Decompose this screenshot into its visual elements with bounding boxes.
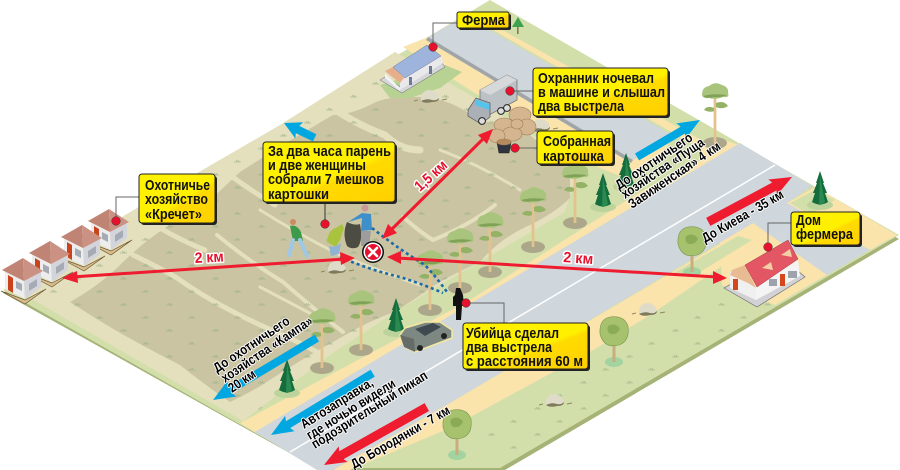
callout: farmer's house: фермера [796, 226, 854, 243]
field: dark tan furrows [70, 97, 570, 402]
icon: farmer's house [724, 240, 805, 307]
road text: to Kiev: До Киева - 35 км [699, 187, 786, 246]
people collecting potatoes [289, 204, 372, 256]
farm road kerb [426, 37, 633, 163]
person: man in blue [348, 204, 372, 246]
road text: Kampa: хозяйства «Кампа» [218, 313, 315, 385]
callout: potato pickers: картошки [268, 186, 329, 203]
icon: collected potato sacks [489, 107, 536, 153]
callout: farm [429, 12, 511, 51]
trees [274, 83, 833, 460]
icon: farm building [380, 45, 445, 93]
road text: Kampa: 20 км [225, 366, 259, 395]
farm lawn [380, 65, 462, 98]
callout: killer: два выстрела [466, 339, 553, 356]
arrow: red to Borodyanka [320, 399, 431, 470]
arrow: 2 km to farmer's house [387, 251, 727, 284]
arrow: blue top-left [280, 115, 319, 146]
arrow: 1,5 km [382, 129, 493, 239]
arrow: blue to Kampa [208, 330, 322, 408]
road text: petrol station: подозрительный пикап [309, 368, 430, 452]
crime scene marker [362, 241, 384, 263]
road text: petrol station: Автозаправка, [298, 375, 376, 432]
road text: Pushcha Zavizhenskaya: Завиженская» 4 км [625, 139, 723, 211]
callout: collected potatoes: картошка [543, 148, 605, 165]
field: light wavy stripes [133, 113, 520, 352]
arrow: blue to Pushcha [632, 112, 705, 165]
callout: guard: Охранник ночевал [538, 70, 654, 87]
sack of potatoes [344, 222, 361, 248]
callout: hunting lodge Krechet: «Кречет» [145, 206, 202, 223]
green strip beside main road [670, 236, 752, 277]
grass tufts on lower green strip [450, 270, 790, 450]
grass tufts texture [22, 52, 586, 421]
road text: Pushcha Zavizhenskaya: До охотничьего [612, 130, 695, 192]
icon: car [400, 322, 452, 352]
arrow: 2 km to lodge [62, 252, 355, 283]
sand strips along roads [240, 27, 897, 470]
main road [255, 143, 870, 470]
farm road [428, 16, 674, 160]
road text: to Borodyanka: До Бородянки - 7 км [348, 403, 453, 470]
callout: guard: два выстрела [538, 98, 625, 115]
callout: farm: Ферма [462, 12, 506, 29]
arrow: blue to petrol station [266, 365, 377, 443]
main road centre line [290, 165, 775, 452]
callout: collected potatoes [511, 131, 615, 166]
distance label: 1,5 km: 1,5 км [411, 157, 451, 195]
icon: hunting lodge houses [1, 209, 132, 304]
blue dotted shot lines [340, 228, 447, 293]
callout: killer [462, 299, 590, 371]
road text: Pushcha Zavizhenskaya: хозяйства «Пуща [618, 135, 707, 201]
field: light tan ground [22, 52, 580, 421]
distance label: 2 km right: 2 км [563, 249, 594, 268]
callout: hunting lodge Krechet: хозяйство [145, 191, 208, 208]
road text: Kampa: До охотничьего [210, 313, 292, 375]
person: woman in green [289, 219, 307, 256]
callout: potato pickers: собрали 7 мешков [268, 171, 384, 188]
road text: Kampa [210, 313, 315, 395]
callout: hunting lodge Krechet [112, 174, 217, 225]
callout: guard: в машине и слышал [538, 84, 665, 101]
callout: killer: с расстояния 60 м [466, 353, 583, 370]
callout: guard [506, 68, 670, 118]
callout: collected potatoes: Собранная [543, 133, 611, 150]
callout: farmer's house: Дом [796, 212, 821, 229]
distance label: 2 km left: 2 км [194, 249, 224, 267]
callout: killer: Убийца сделал [466, 325, 559, 342]
road text: petrol station: где ночью видели [304, 376, 398, 443]
callout: hunting lodge Krechet: Охотничье [145, 177, 210, 194]
callout: potato pickers [263, 142, 397, 228]
arrow: red to Kiev [704, 169, 796, 230]
callout: farmer's house [764, 212, 862, 251]
icon: guard truck [468, 75, 517, 124]
person: crouching woman [327, 224, 344, 256]
callout: potato pickers: и две женщины [268, 157, 366, 174]
callout: potato pickers: За два часа парень [268, 143, 391, 160]
icon: killer silhouette [453, 288, 464, 320]
green patch at the spruce by the side road [790, 190, 835, 215]
icon: small tree by the farm label [512, 17, 524, 34]
